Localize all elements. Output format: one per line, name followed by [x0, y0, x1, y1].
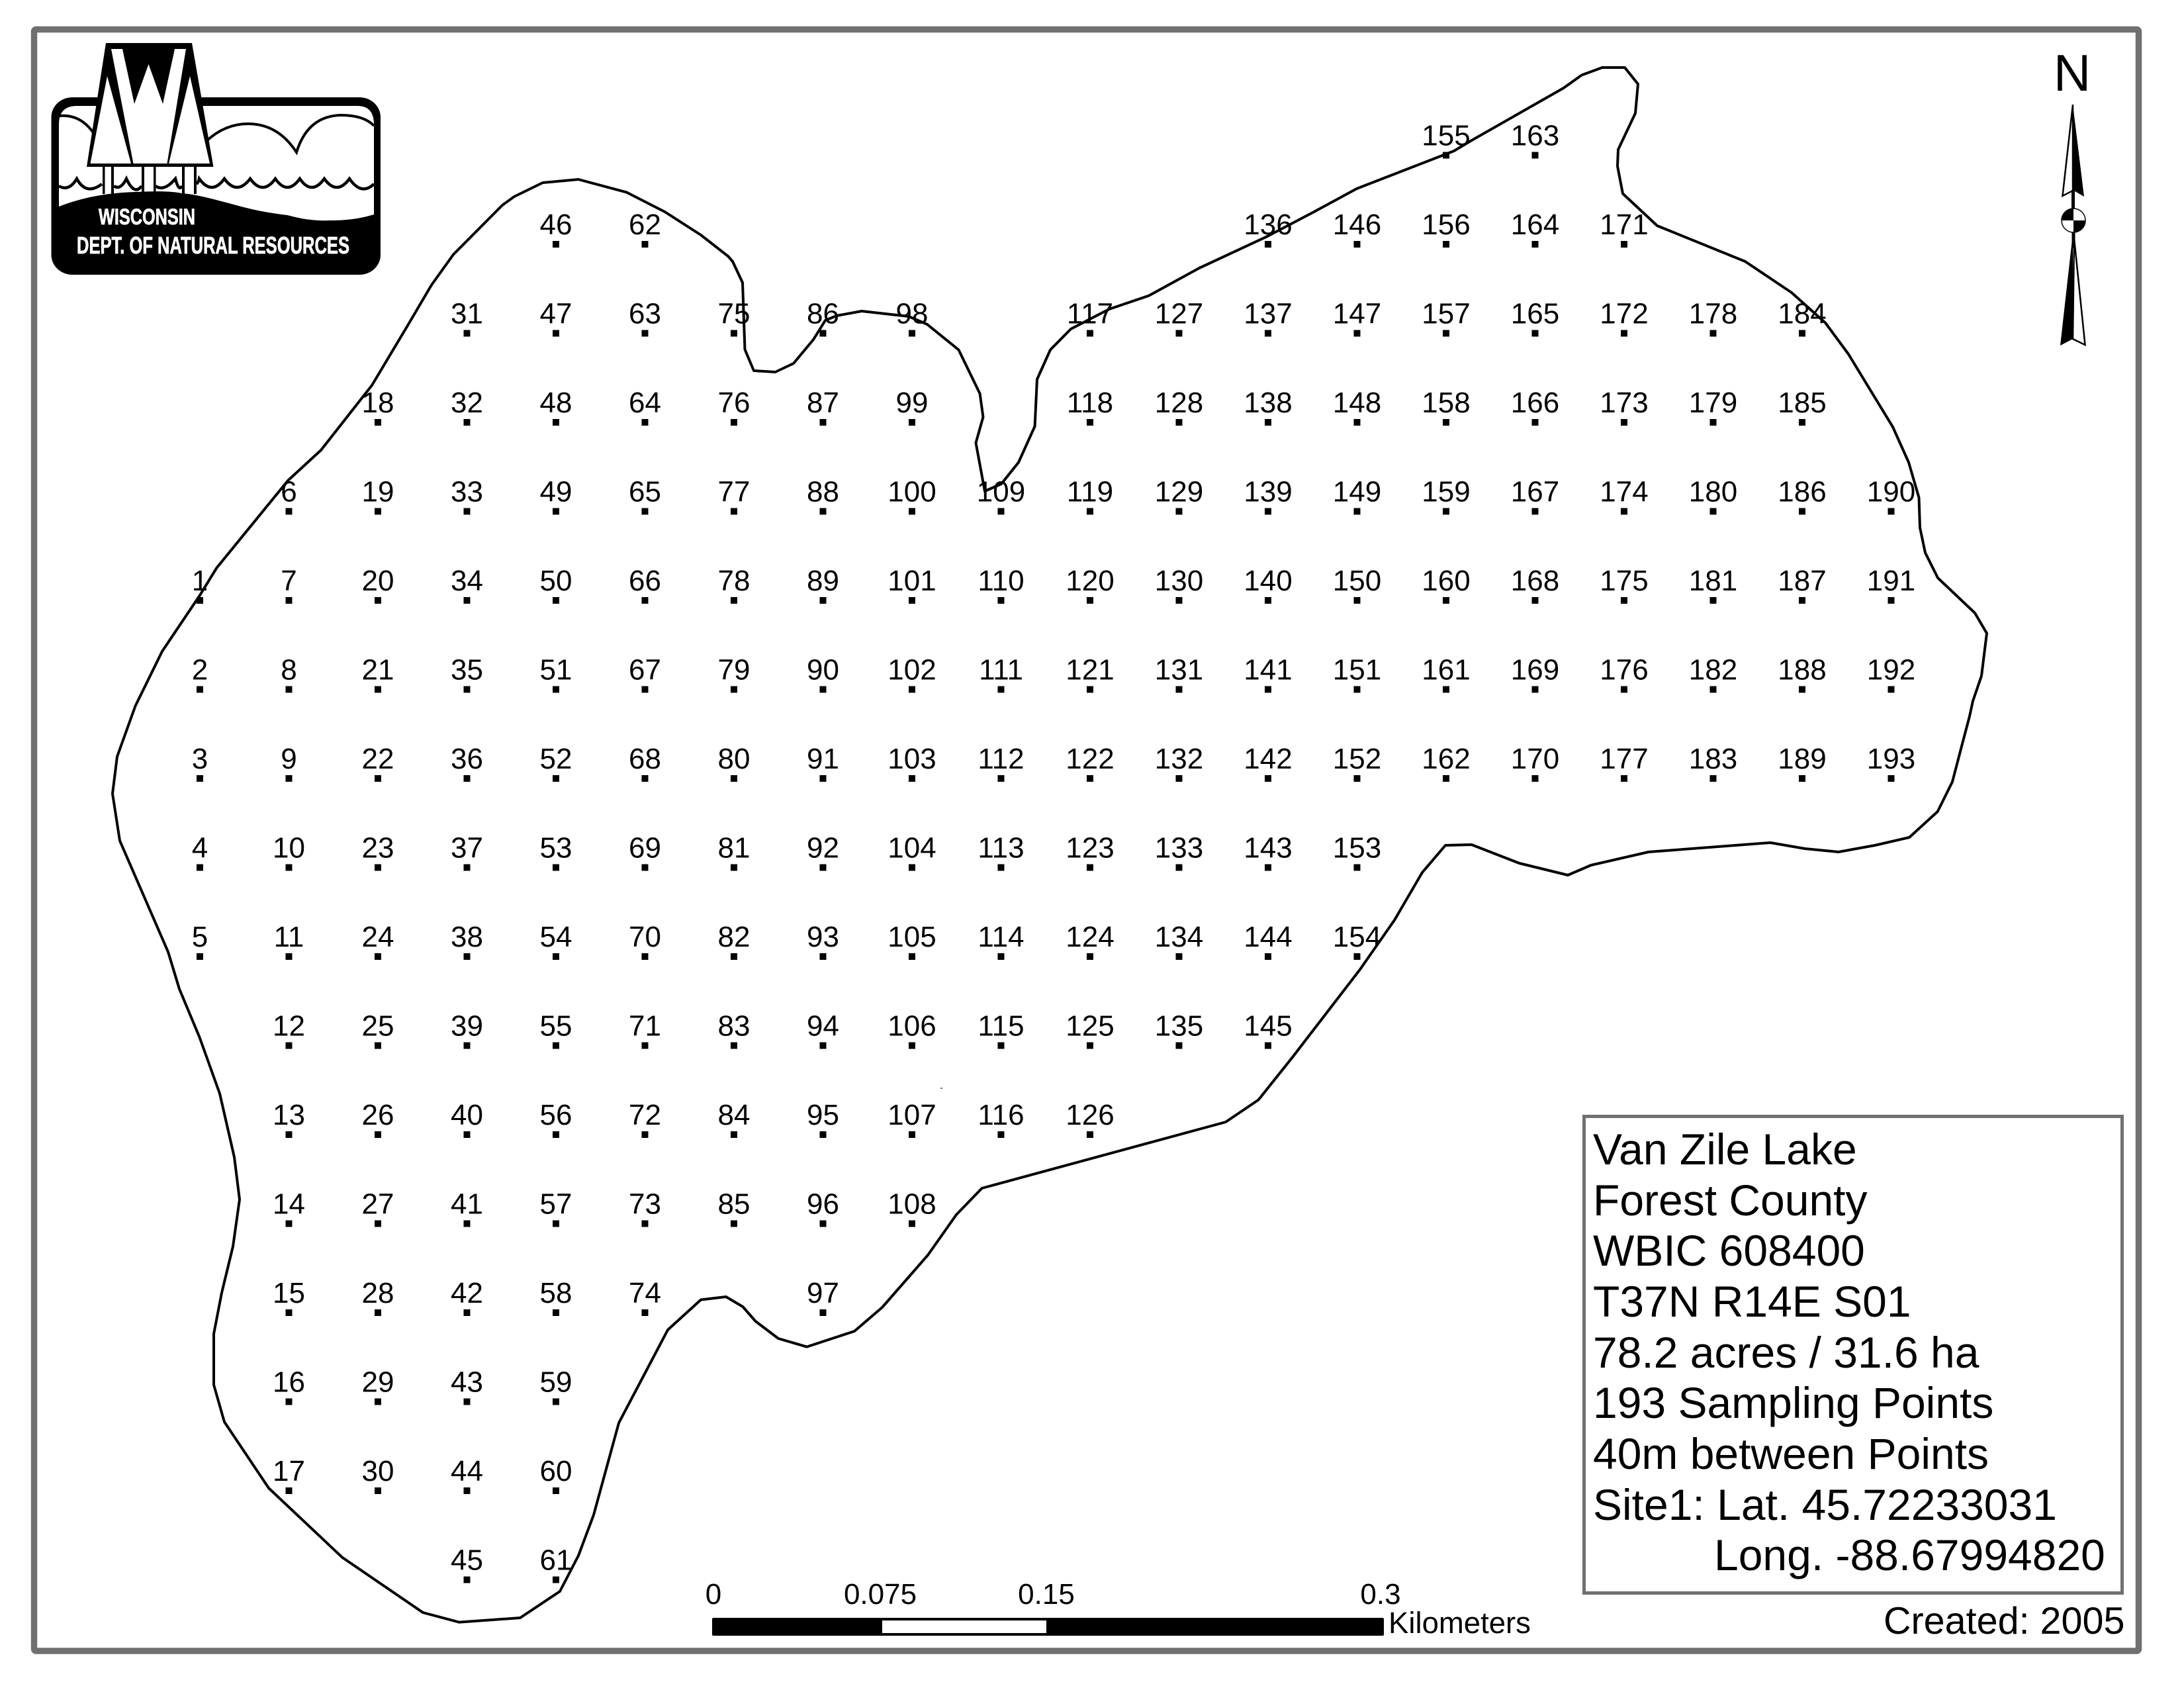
points 178-183: 179: [1689, 387, 1737, 419]
points 6-17: 11: [274, 921, 304, 953]
points 127-135: 131: [1155, 654, 1203, 686]
points 109-116: [977, 475, 1025, 1139]
points 46-61: 53: [540, 831, 572, 865]
points 98-108: 107: [887, 1099, 936, 1131]
points 127-135: 132: [1155, 743, 1203, 775]
points 117-126: 121: [1066, 654, 1115, 686]
points 127-135: 134: [1155, 921, 1203, 953]
points 190-193: 190: [1867, 475, 1915, 508]
points 6-17: 13: [273, 1099, 305, 1131]
points 86-97: 94: [807, 1010, 839, 1042]
points 6-17: 12: [273, 1010, 305, 1042]
points 6-17: 15: [273, 1277, 305, 1309]
lower arrowhead: [2073, 238, 2085, 345]
points 109-116: 113: [978, 831, 1024, 865]
points 98-108: 104: [887, 831, 936, 865]
points 46-61: 51: [540, 654, 572, 686]
points 6-17: [273, 475, 305, 1495]
points 46-61: 52: [540, 743, 572, 775]
points 136-145: 145: [1244, 1010, 1293, 1042]
points 136-145: 136: [1244, 209, 1293, 241]
sampling point count: 193 Sampling Points: [1593, 1378, 1993, 1427]
logo hills: [59, 115, 374, 152]
points 171-177: 174: [1600, 475, 1649, 508]
points 171-177: 172: [1600, 298, 1649, 330]
points 31-45: 38: [451, 921, 483, 953]
points 190-193: 193: [1867, 743, 1915, 775]
points 46-61: 59: [540, 1366, 572, 1398]
points 171-177: [1600, 209, 1649, 782]
points 171-177: 177: [1600, 743, 1649, 775]
points 127-135: 128: [1155, 387, 1203, 419]
scale labels: 0.15: [1018, 1578, 1075, 1611]
points 31-45: 42: [451, 1277, 483, 1309]
points 75-85: 78: [718, 565, 750, 597]
logo badge: [52, 97, 381, 275]
points 46-61: 61: [540, 1544, 572, 1577]
points 190-193: 191: [1867, 565, 1915, 597]
logo white W: [111, 49, 186, 164]
points 184-189: [1778, 298, 1827, 782]
points 86-97: 95: [807, 1099, 839, 1131]
points 86-97: 91: [807, 743, 839, 775]
points 136-145: 143: [1244, 831, 1293, 865]
points 46-61: 49: [540, 475, 572, 508]
points 62-74: 67: [629, 654, 661, 686]
points 109-116: 109: [977, 475, 1025, 508]
points 31-45: 43: [451, 1366, 483, 1398]
points 98-108: 108: [887, 1188, 936, 1221]
points 46-61: [540, 209, 572, 1583]
points 117-126: 124: [1066, 921, 1115, 953]
points 86-97: 97: [807, 1277, 839, 1309]
points 184-189: 186: [1778, 475, 1827, 508]
points 178-183: 182: [1689, 654, 1737, 686]
points 75-85: 77: [718, 475, 750, 508]
points 109-116: 111: [979, 654, 1023, 686]
logo trunks: [103, 164, 197, 194]
points 62-74: 64: [629, 387, 661, 419]
points 136-145: 138: [1244, 387, 1293, 419]
points 136-145: 141: [1244, 654, 1293, 686]
points 18-30: 18: [362, 387, 394, 419]
points 62-74: 70: [629, 921, 661, 953]
points 136-145: 139: [1244, 475, 1293, 508]
points 86-97: 93: [807, 921, 839, 953]
points 163-170: 168: [1511, 565, 1559, 597]
arrow stem: [2071, 190, 2075, 248]
points 98-108: 106: [887, 1010, 936, 1042]
info box border: [1584, 1116, 2122, 1593]
points 127-135: [1155, 298, 1203, 1049]
compass circle: [2062, 209, 2085, 232]
points 163-170: 169: [1511, 654, 1559, 686]
points 1-5: 2: [192, 654, 208, 686]
points 163-170: 164: [1511, 209, 1559, 241]
points 184-189: 187: [1778, 565, 1827, 597]
scale unit: Kilometers: [1388, 1606, 1531, 1640]
scale labels: [705, 1578, 1401, 1611]
points 6-17: 10: [273, 831, 305, 865]
points 190-193: 192: [1867, 654, 1915, 686]
points 171-177: 171: [1600, 209, 1649, 241]
points 117-126: 118: [1067, 387, 1113, 419]
points 127-135: 133: [1155, 831, 1203, 865]
points 127-135: 129: [1155, 475, 1203, 508]
points 178-183: [1689, 298, 1737, 782]
points 46-61: 46: [540, 209, 572, 241]
points 1-5: 4: [192, 831, 208, 865]
north letter: N: [2054, 44, 2091, 102]
points 146-154: 151: [1333, 654, 1381, 686]
points 31-45: 35: [451, 654, 483, 686]
points 163-170: [1511, 119, 1559, 782]
points 6-17: 16: [273, 1366, 305, 1398]
points 18-30: 29: [362, 1366, 394, 1398]
points 6-17: 6: [281, 475, 297, 508]
points 46-61: 48: [540, 387, 572, 419]
points 146-154: 149: [1333, 475, 1381, 508]
points 18-30: 27: [362, 1188, 394, 1221]
points 98-108: 100: [887, 475, 936, 508]
logo tree silhouette: [87, 43, 213, 167]
points 98-108: [887, 298, 936, 1227]
points 146-154: 147: [1333, 298, 1381, 330]
points 117-126: 126: [1066, 1099, 1115, 1131]
scale labels: 0.075: [844, 1578, 917, 1611]
created date: Created: 2005: [1884, 1600, 2124, 1642]
points 86-97: 90: [807, 654, 839, 686]
logo waves: [59, 179, 374, 189]
points 117-126: 117: [1067, 298, 1113, 330]
lake outline: [113, 68, 1987, 1622]
points 155-162: 159: [1422, 475, 1471, 508]
points 62-74: 62: [629, 209, 661, 241]
points 146-154: 152: [1333, 743, 1381, 775]
points 46-61: 56: [540, 1099, 572, 1131]
points 1-5: 5: [192, 921, 208, 953]
points 62-74: 72: [629, 1099, 661, 1131]
sampling points grid: [192, 119, 1915, 1583]
points 75-85: 79: [718, 654, 750, 686]
points 46-61: 47: [540, 298, 572, 330]
points 190-193: [1867, 475, 1915, 782]
points 31-45: 39: [451, 1010, 483, 1042]
points 18-30: 30: [362, 1455, 394, 1487]
points 62-74: 68: [629, 743, 661, 775]
points 31-45: [451, 298, 483, 1583]
points 109-116: 114: [978, 921, 1024, 953]
points 75-85: 84: [718, 1099, 750, 1131]
points 136-145: 137: [1244, 298, 1293, 330]
points 18-30: 25: [362, 1010, 394, 1042]
points 155-162: 155: [1422, 119, 1471, 152]
points 31-45: 44: [451, 1455, 483, 1487]
logo text: department: DEPT. OF NATURAL RESOURCES: [77, 232, 349, 259]
logo: Wisconsin DNR: [52, 43, 381, 275]
points 109-116: 112: [978, 743, 1024, 775]
points 18-30: [362, 387, 394, 1495]
points 31-45: 36: [451, 743, 483, 775]
points 98-108: 98: [896, 298, 928, 330]
points 98-108: 105: [887, 921, 936, 953]
points 46-61: 55: [540, 1010, 572, 1042]
logo sky and water: [59, 106, 374, 220]
scale labels: 0: [705, 1578, 721, 1611]
latitude: Site1: Lat. 45.72233031: [1593, 1480, 2057, 1529]
points 46-61: 58: [540, 1277, 572, 1309]
points 6-17: 9: [281, 743, 297, 775]
points 1-5: 1: [192, 565, 208, 597]
points 18-30: 19: [362, 475, 394, 508]
lake name: Van Zile Lake: [1593, 1125, 1857, 1174]
points 155-162: 157: [1422, 298, 1471, 330]
points 18-30: 20: [362, 565, 394, 597]
points 109-116: 116: [978, 1099, 1024, 1131]
points 31-45: 32: [451, 387, 483, 419]
scale labels: 0.3: [1360, 1578, 1401, 1611]
points 163-170: 165: [1511, 298, 1559, 330]
points 98-108: 101: [887, 565, 936, 597]
north arrow: [2054, 44, 2091, 346]
points 155-162: 162: [1422, 743, 1471, 775]
points 31-45: 41: [451, 1188, 483, 1221]
points 6-17: 7: [281, 565, 297, 597]
points 75-85: 83: [718, 1010, 750, 1042]
points 31-45: 40: [451, 1099, 483, 1131]
points 136-145: 144: [1244, 921, 1293, 953]
points 146-154: 148: [1333, 387, 1381, 419]
points 184-189: 189: [1778, 743, 1827, 775]
points 98-108: 99: [896, 387, 928, 419]
points 171-177: 176: [1600, 654, 1649, 686]
points 98-108: 102: [887, 654, 936, 686]
points 127-135: 135: [1155, 1010, 1203, 1042]
points 46-61: 50: [540, 565, 572, 597]
points 86-97: 86: [807, 298, 839, 330]
points 184-189: 188: [1778, 654, 1827, 686]
longitude: Long. -88.67994820: [1714, 1530, 2105, 1579]
points 18-30: 22: [362, 743, 394, 775]
points 117-126: 125: [1066, 1010, 1115, 1042]
points 178-183: 183: [1689, 743, 1737, 775]
points 86-97: [807, 298, 839, 1317]
points 75-85: 85: [718, 1188, 750, 1221]
points 127-135: 130: [1155, 565, 1203, 597]
points 98-108: 103: [887, 743, 936, 775]
points 109-116: 115: [978, 1010, 1024, 1042]
points 163-170: 167: [1511, 475, 1559, 508]
points 136-145: 140: [1244, 565, 1293, 597]
points 146-154: 153: [1333, 831, 1381, 865]
points 117-126: [1066, 298, 1115, 1139]
upper arrowhead: [2062, 105, 2073, 196]
points 75-85: 75: [718, 298, 750, 330]
points 178-183: 178: [1689, 298, 1737, 330]
points 155-162: 158: [1422, 387, 1471, 419]
points 163-170: 166: [1511, 387, 1559, 419]
stray map speck: [940, 1088, 942, 1089]
points 31-45: 31: [451, 298, 483, 330]
points 178-183: 180: [1689, 475, 1737, 508]
points 163-170: 170: [1511, 743, 1559, 775]
points 62-74: [629, 209, 661, 1317]
points 146-154: 154: [1333, 921, 1381, 953]
points 62-74: 65: [629, 475, 661, 508]
points 6-17: 17: [273, 1455, 305, 1487]
points 155-162: 156: [1422, 209, 1471, 241]
points 184-189: 185: [1778, 387, 1827, 419]
points 117-126: 119: [1067, 475, 1113, 508]
points 18-30: 26: [362, 1099, 394, 1131]
points 136-145: 142: [1244, 743, 1293, 775]
points 18-30: 21: [362, 654, 394, 686]
points 163-170: 163: [1511, 119, 1559, 152]
points 155-162: 161: [1422, 654, 1471, 686]
scale bar black: [712, 1618, 1384, 1636]
points 1-5: [192, 565, 208, 961]
points 146-154: [1333, 209, 1381, 961]
points 62-74: 74: [629, 1277, 661, 1309]
points 31-45: 45: [451, 1544, 483, 1577]
points 62-74: 71: [629, 1010, 661, 1042]
points 1-5: 3: [192, 743, 208, 775]
points 46-61: 54: [540, 921, 572, 953]
points 18-30: 23: [362, 831, 394, 865]
points 117-126: 120: [1066, 565, 1115, 597]
points 171-177: 173: [1600, 387, 1649, 419]
points 86-97: 89: [807, 565, 839, 597]
points 31-45: 37: [451, 831, 483, 865]
points 155-162: 160: [1422, 565, 1471, 597]
points 31-45: 33: [451, 475, 483, 508]
points 75-85: 80: [718, 743, 750, 775]
points 146-154: 150: [1333, 565, 1381, 597]
points 178-183: 181: [1689, 565, 1737, 597]
points 146-154: 146: [1333, 209, 1381, 241]
points 86-97: 92: [807, 831, 839, 865]
point spacing: 40m between Points: [1593, 1429, 1989, 1478]
points 155-162: [1422, 119, 1471, 782]
points 18-30: 28: [362, 1277, 394, 1309]
points 6-17: 14: [273, 1188, 305, 1221]
points 62-74: 63: [629, 298, 661, 330]
points 62-74: 69: [629, 831, 661, 865]
township range section: T37N R14E S01: [1593, 1277, 1911, 1326]
points 86-97: 87: [807, 387, 839, 419]
points 31-45: 34: [451, 565, 483, 597]
points 117-126: 123: [1066, 831, 1115, 865]
points 86-97: 96: [807, 1188, 839, 1221]
scale bar: [705, 1578, 1531, 1640]
points 136-145: [1244, 209, 1293, 1049]
WBIC: WBIC 608400: [1593, 1226, 1865, 1275]
points 75-85: 81: [718, 831, 750, 865]
logo white side trees: [90, 76, 210, 164]
scale bar white segment: [882, 1620, 1046, 1633]
points 18-30: 24: [362, 921, 394, 953]
area: 78.2 acres / 31.6 ha: [1593, 1328, 1979, 1377]
points 109-116: 110: [978, 565, 1024, 597]
points 171-177: 175: [1600, 565, 1649, 597]
points 46-61: 57: [540, 1188, 572, 1221]
points 117-126: 122: [1066, 743, 1115, 775]
points 6-17: 8: [281, 654, 297, 686]
points 46-61: 60: [540, 1455, 572, 1487]
points 75-85: 76: [718, 387, 750, 419]
county: Forest County: [1593, 1176, 1868, 1225]
points 62-74: 66: [629, 565, 661, 597]
points 75-85: 82: [718, 921, 750, 953]
points 127-135: 127: [1155, 298, 1203, 330]
points 62-74: 73: [629, 1188, 661, 1221]
points 184-189: 184: [1778, 298, 1827, 330]
panel: lake information: [1584, 1116, 2122, 1593]
points 86-97: 88: [807, 475, 839, 508]
points 75-85: [718, 298, 750, 1227]
logo text: Wisconsin: WISCONSIN: [99, 205, 195, 230]
